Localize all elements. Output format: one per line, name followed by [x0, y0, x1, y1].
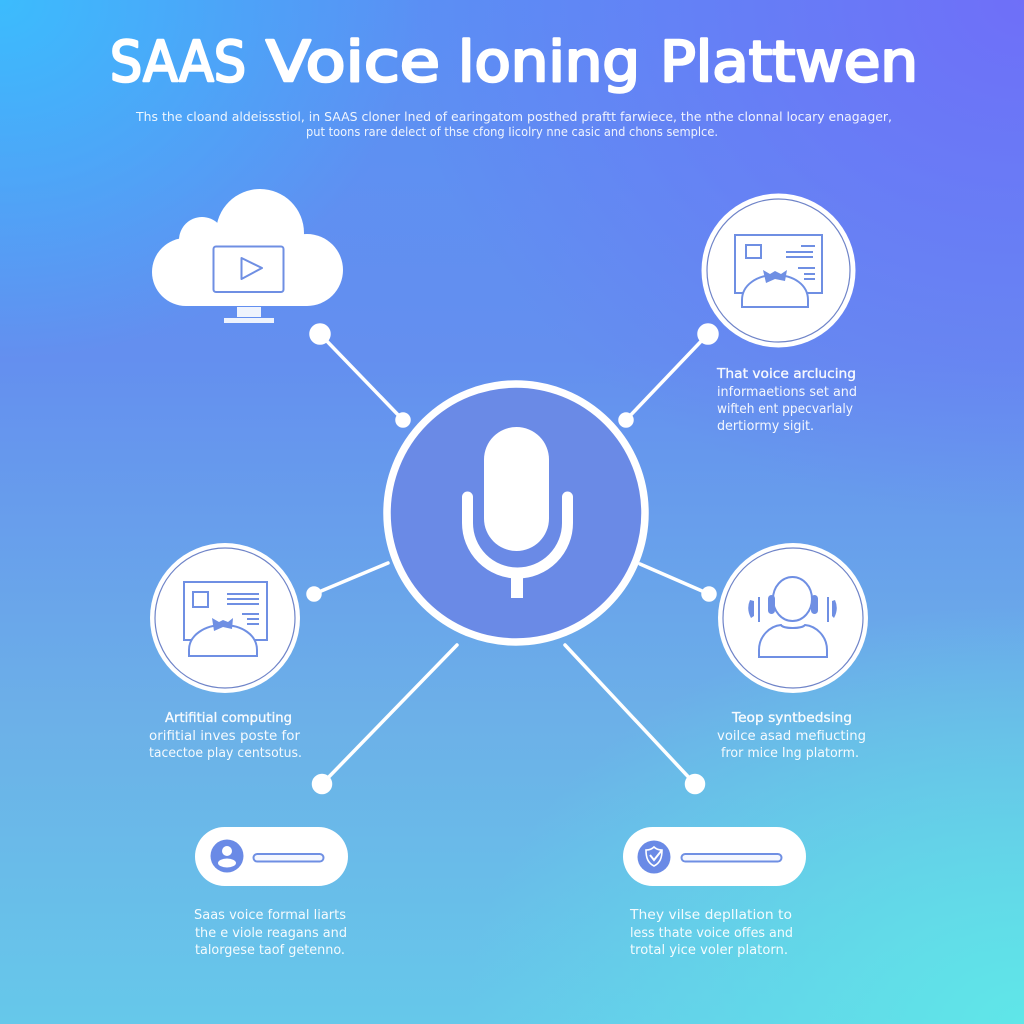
- text block: bottom left: [194, 908, 347, 958]
- text block: bottom right: [629, 908, 793, 958]
- text block: bottom right: less thate voice offes and: [630, 926, 793, 941]
- icon: top right presenter card: [702, 194, 856, 348]
- text block: bottom left: the e viole reagans and: [195, 926, 347, 941]
- text block: right: voilce asad mefiucting: [717, 729, 866, 744]
- title: [110, 30, 918, 95]
- connector lines: [308, 325, 717, 792]
- title: loning: [458, 30, 640, 95]
- title: SAAS: [110, 30, 246, 95]
- subtitle: put toons rare delect of thse cfong Iicolry nne casic and chons semplce.: [306, 125, 718, 139]
- text block: top right: dertiormy sigit.: [717, 419, 814, 434]
- text block: bottom right: They vilse depllation to: [629, 908, 792, 923]
- text block: right: [717, 711, 866, 761]
- text block: left: [149, 711, 302, 761]
- text block: top right: That voice arclucing: [716, 367, 856, 382]
- pill: user: [195, 827, 348, 886]
- subtitle: Ths the cloand aldeissstiol, in SAAS cloner lned of earingatom posthed praftt farwiece, the nthe clonnal locary enagager,: [135, 110, 892, 124]
- pill: check: [623, 827, 806, 886]
- text block: bottom left: Saas voice formal liarts: [194, 908, 346, 923]
- icon: cloud with video monitor: [152, 189, 343, 323]
- text block: left: Artifitial computing: [165, 711, 292, 726]
- text block: right: Teop syntbedsing: [731, 711, 852, 726]
- title: Voice: [266, 30, 440, 95]
- text block: left: tacectoe play centsotus.: [149, 746, 302, 761]
- text block: top right: informaetions set and: [717, 385, 857, 400]
- text block: top right: [716, 367, 857, 434]
- text block: left: orifitial inves poste for: [149, 729, 301, 744]
- icon: left presenter card: [150, 543, 300, 693]
- central microphone: [387, 384, 645, 642]
- title: Plattwen: [660, 30, 918, 95]
- text block: bottom left: talorgese taof getenno.: [195, 943, 345, 958]
- text block: bottom right: trotal yice voler platorn.: [630, 943, 788, 958]
- text block: top right: wifteh ent ppecvarlaly: [717, 402, 853, 417]
- text block: right: fror mice Ing platorm.: [721, 746, 859, 761]
- icon: headset person: [718, 543, 868, 693]
- subtitle: [135, 110, 892, 139]
